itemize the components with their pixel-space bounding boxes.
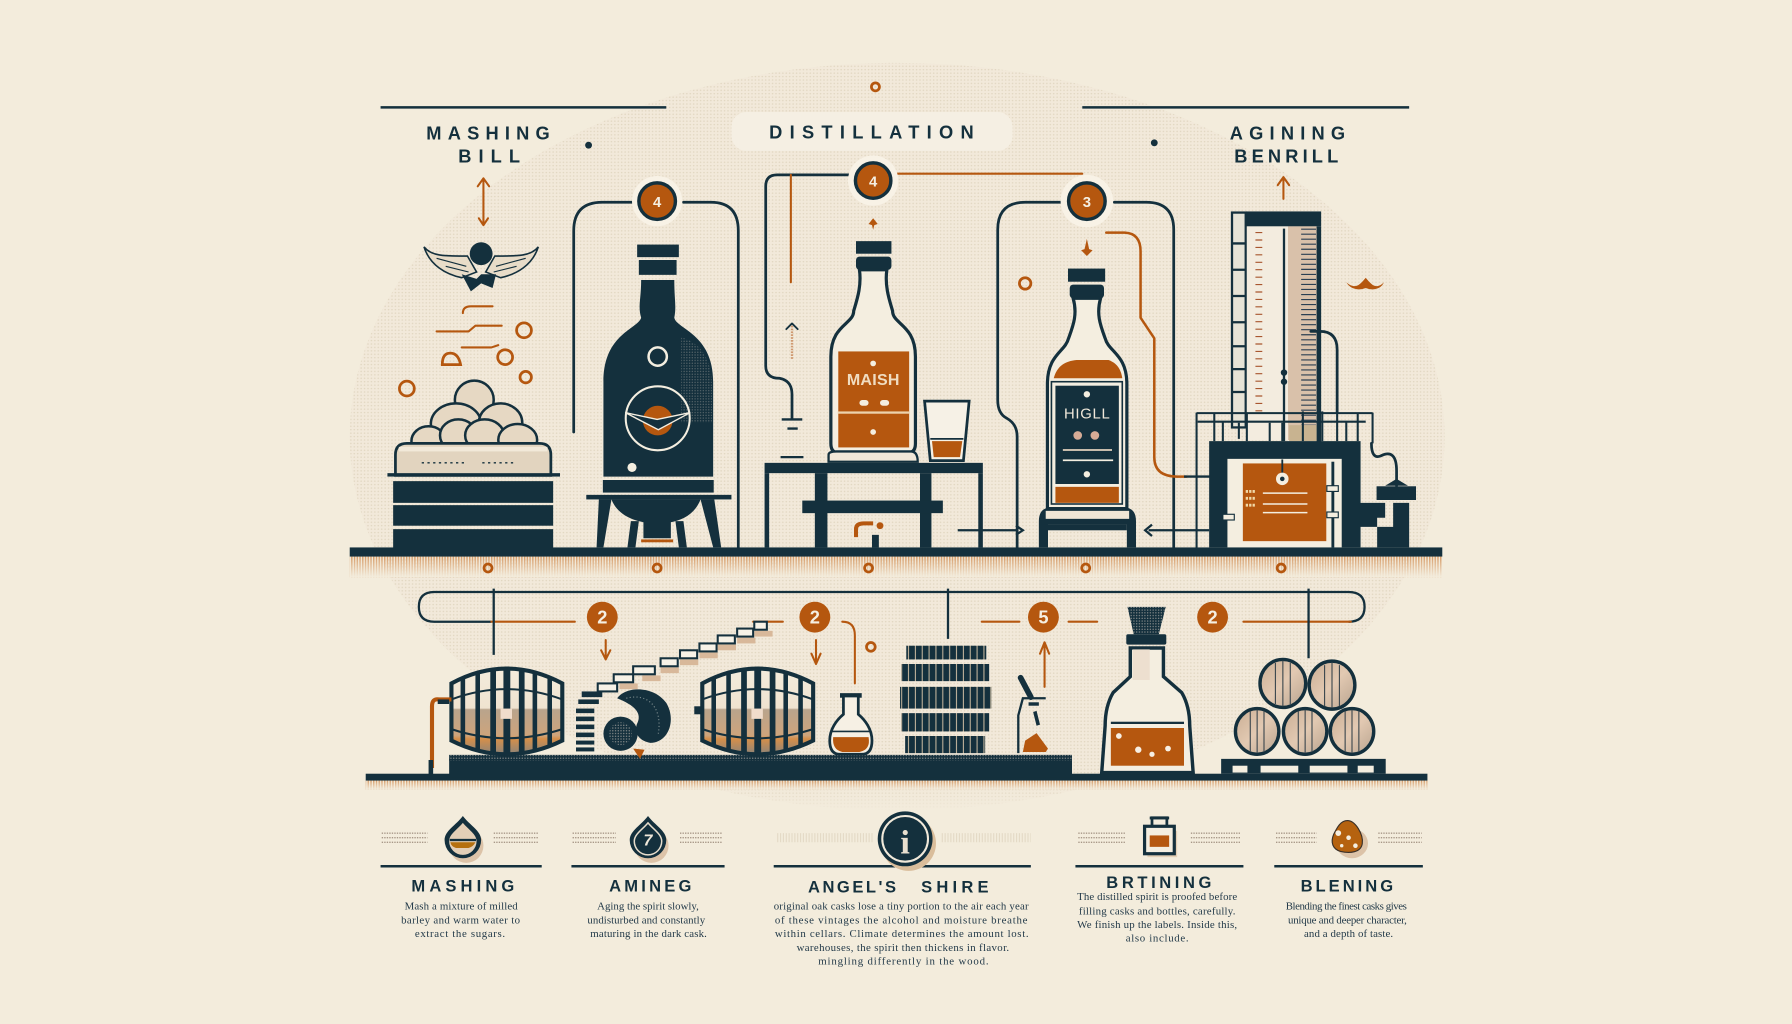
illustration: labelled whisky bottle bbox=[829, 241, 918, 462]
column: blending: Blending the finest casks gives bbox=[1286, 901, 1407, 913]
column: angel's share: SHIRE bbox=[921, 878, 989, 897]
column: bottling: We finish up the labels. Inside this, bbox=[1077, 919, 1237, 931]
arrow: double ended bbox=[478, 178, 489, 225]
badge: step 2a: 2 bbox=[597, 606, 607, 627]
badge: step 2: 4 bbox=[869, 174, 878, 190]
column: aging: AMINEG bbox=[609, 876, 691, 895]
badge: step 3 bbox=[1061, 175, 1113, 227]
arrow: up to aging heading bbox=[1278, 177, 1289, 199]
icon: winged emblem bbox=[424, 242, 538, 291]
column: aging: maturing in the dark cask. bbox=[590, 928, 707, 940]
heading: aging benrill bbox=[1082, 107, 1409, 166]
arrow: toward bottle bbox=[958, 526, 1023, 535]
badge: step 3: 3 bbox=[1083, 195, 1091, 211]
badge: step 5 bbox=[1028, 602, 1059, 633]
column: mashing: extract the sugars. bbox=[415, 928, 505, 940]
illustration: staircase and coil bbox=[576, 622, 773, 759]
column: angel's share: within cellars. Climate determines the amount lost. bbox=[775, 928, 1029, 940]
column: angel's share: warehouses, the spirit then thickens in flavor. bbox=[797, 942, 1009, 954]
bottom rules bbox=[381, 865, 1423, 867]
arrow: toward bottle from furnace bbox=[1145, 525, 1209, 536]
arrows: lower row bbox=[601, 640, 1049, 687]
illustration: barrel two bbox=[694, 663, 813, 760]
markers under upper floor bbox=[484, 564, 1285, 572]
column: blending bbox=[1276, 821, 1422, 940]
badge: step 1: 4 bbox=[653, 195, 662, 211]
column: blending: and a depth of taste. bbox=[1304, 928, 1393, 940]
column: bottling: also include. bbox=[1126, 933, 1189, 945]
shelf: upper floor bbox=[350, 547, 1442, 577]
column: angel's share: mingling differently in the wood. bbox=[818, 956, 989, 968]
illustration: dark bottle still bbox=[586, 245, 731, 547]
column: blending: unique and deeper character, bbox=[1288, 914, 1407, 926]
badge: step 2c: 2 bbox=[1207, 606, 1218, 627]
column: bottling: filling casks and bottles, carefully. bbox=[1079, 905, 1235, 917]
accent dots bbox=[585, 83, 1158, 149]
badge: step 2b bbox=[799, 602, 830, 633]
icon: small jar with scoop bbox=[1018, 678, 1048, 753]
column: angel's share bbox=[774, 811, 1031, 968]
heading: mashing bill bbox=[381, 107, 666, 166]
column: blending: BLENING bbox=[1301, 876, 1393, 895]
badge: step 2 bbox=[848, 155, 898, 206]
connector: step 3 arch bbox=[998, 202, 1211, 549]
column: aging: 7 bbox=[644, 833, 654, 850]
column: angel's share: of these vintages the alcohol and moisture breathe bbox=[775, 914, 1028, 926]
illustration: barrel one bbox=[429, 663, 562, 775]
illustration: large flask with cork bbox=[1102, 607, 1193, 773]
illustration: labelled whisky bottle: MAISH bbox=[847, 372, 899, 389]
illustration: mash tub with grain pile bbox=[387, 381, 560, 550]
illustration: stacked barrels on pallet bbox=[1221, 659, 1386, 774]
infographic canvas bbox=[350, 63, 1444, 967]
column: aging: undisturbed and constantly bbox=[587, 914, 706, 926]
shelf: lower floor bbox=[366, 755, 1427, 790]
column: mashing: barley and warm water to bbox=[401, 914, 521, 926]
badge: step 2c bbox=[1197, 602, 1228, 633]
connector: lower loop bbox=[419, 589, 1365, 683]
connector: step 2 pipe bbox=[766, 174, 1082, 457]
column: bottling: The distilled spirit is proofed before bbox=[1077, 891, 1237, 903]
column: bottling: BRTINING bbox=[1106, 873, 1211, 892]
heading: mashing bill: BILL bbox=[458, 145, 520, 166]
illustration: hill bottle: HIGLL bbox=[1064, 406, 1110, 422]
column: angel's share: ANGEL'S bbox=[808, 878, 896, 897]
illustration: aging column and furnace bbox=[1197, 211, 1416, 549]
icon: orange mustache mark bbox=[1346, 278, 1384, 289]
column: mashing: Mash a mixture of milled bbox=[405, 901, 518, 913]
illustration: table with bottle and glass bbox=[765, 463, 983, 547]
badge: step 1 bbox=[632, 176, 682, 226]
connector: step 1 arch bbox=[574, 202, 738, 549]
illustration: hill bottle bbox=[1039, 269, 1136, 547]
heading: mashing bill: MASHING bbox=[426, 122, 550, 143]
icon: whisky glass bbox=[925, 401, 969, 461]
column: mashing: MASHING bbox=[411, 876, 514, 895]
heading panel: distillation bbox=[731, 112, 1013, 151]
column: bottling bbox=[1077, 817, 1240, 945]
badge: step 2a bbox=[587, 602, 618, 633]
heading: aging benrill: AGINING bbox=[1230, 122, 1345, 143]
icon: small flask bbox=[830, 693, 872, 754]
heading: aging benrill: BENRILL bbox=[1234, 145, 1338, 166]
icon: grain particles bbox=[399, 306, 531, 396]
column: aging: Aging the spirit slowly, bbox=[597, 901, 699, 913]
heading panel: distillation: DISTILLATION bbox=[769, 121, 974, 142]
column: angel's share: original oak casks lose a tiny portion to the air each year bbox=[774, 901, 1029, 913]
column: mashing bbox=[382, 816, 538, 940]
column: angel's share: i bbox=[900, 824, 910, 862]
badge: step 2b: 2 bbox=[810, 606, 820, 627]
badge: step 5: 5 bbox=[1038, 606, 1049, 627]
illustration: large banded barrel bbox=[900, 646, 991, 753]
column: aging bbox=[573, 816, 722, 940]
